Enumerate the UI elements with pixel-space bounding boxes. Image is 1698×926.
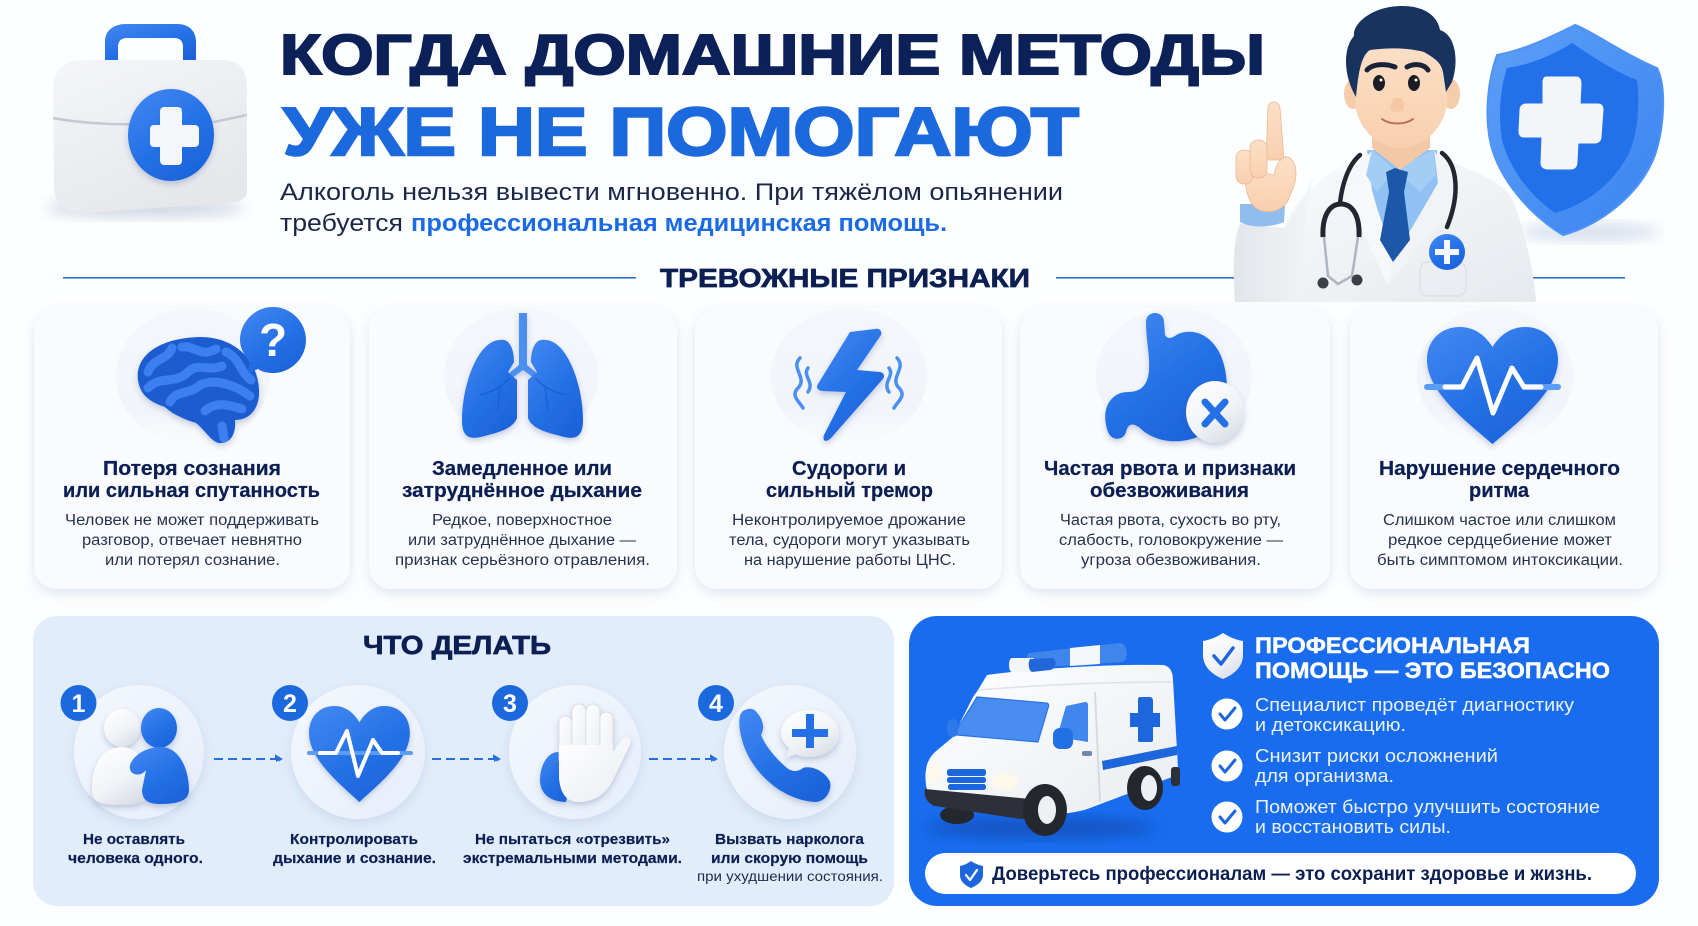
card description: Слишком частое или слишком bbox=[1383, 512, 1616, 529]
card title: Потеря сознания bbox=[103, 458, 281, 480]
tie bbox=[1380, 168, 1410, 262]
rear bumper bbox=[1171, 767, 1180, 786]
hand bbox=[1236, 102, 1296, 212]
card title bbox=[63, 458, 320, 502]
halo bbox=[116, 308, 270, 444]
bullet 2 bbox=[1212, 746, 1498, 786]
card title: Частая рвота и признаки bbox=[1044, 458, 1296, 480]
bullet 2: для организма. bbox=[1255, 766, 1394, 786]
card title bbox=[402, 458, 642, 502]
caption: экстремальными методами. bbox=[463, 850, 682, 867]
icon: first aid kit bbox=[45, 24, 247, 217]
card description bbox=[395, 512, 650, 569]
card background bbox=[1020, 308, 1330, 589]
icon: phone bbox=[739, 709, 830, 802]
headlights bbox=[926, 764, 942, 782]
caption bbox=[68, 831, 203, 867]
halo bbox=[1417, 308, 1573, 444]
bullet 3: Поможет быстро улучшить состояние bbox=[1255, 797, 1600, 817]
callout: trust professionals: Доверьтесь профессионалам — это сохранит здоровье и жизнь. bbox=[992, 864, 1592, 885]
windshield bbox=[955, 697, 1049, 742]
card description bbox=[1059, 512, 1284, 569]
sleeve bbox=[1234, 178, 1313, 302]
bullet 2: Снизит риски осложнений bbox=[1255, 746, 1498, 766]
panel: symptom card 4 bbox=[1020, 308, 1330, 589]
icon: question bubble: ? bbox=[259, 314, 287, 366]
panel: symptom card 2 bbox=[369, 308, 677, 589]
card title bbox=[1379, 458, 1620, 502]
badge: 2 bbox=[272, 685, 308, 721]
bullet 1: и детоксикацию. bbox=[1255, 715, 1406, 735]
caption: Контролировать bbox=[290, 831, 418, 848]
arrow 2 bbox=[432, 756, 499, 762]
step 1 bbox=[60, 685, 204, 867]
heading: professional help is safe: ПОМОЩЬ — ЭТО БЕЗОПАСНО bbox=[1255, 658, 1610, 683]
bullet 3: и восстановить силы. bbox=[1255, 817, 1451, 837]
icon: heart with pulse bbox=[309, 706, 411, 802]
icon: shield check bbox=[1203, 633, 1243, 679]
card title: Нарушение сердечного bbox=[1379, 458, 1620, 480]
door handle bbox=[1082, 751, 1092, 756]
card description: на нарушение работы ЦНС. bbox=[744, 552, 956, 569]
card description: быть симптомом интоксикации. bbox=[1377, 552, 1623, 569]
subtitle text: профессиональная медицинская помощь. bbox=[411, 210, 947, 237]
eyebrows bbox=[1367, 65, 1428, 70]
caption: или скорую помощь bbox=[711, 850, 868, 867]
card title: или сильная спутанность bbox=[63, 480, 320, 502]
card title: Судороги и bbox=[792, 458, 906, 480]
card description bbox=[729, 512, 970, 569]
badge: 3 bbox=[492, 685, 528, 721]
subtitle text bbox=[280, 179, 1063, 237]
grille bbox=[947, 769, 986, 790]
card description: или затруднённое дыхание — bbox=[408, 532, 637, 549]
subtitle text: Алкоголь нельзя вывести мгновенно. При тяжёлом опьянении bbox=[280, 179, 1063, 206]
icon: two people bbox=[92, 708, 189, 805]
title bbox=[280, 23, 1265, 170]
icon: stop hand bbox=[540, 704, 631, 802]
stethoscope bbox=[1340, 153, 1456, 227]
face bbox=[1355, 38, 1447, 148]
side window bbox=[1057, 702, 1088, 742]
panel background bbox=[33, 616, 894, 906]
caption bbox=[463, 831, 682, 867]
under wheel bbox=[940, 806, 974, 824]
card description: Неконтролируемое дрожание bbox=[732, 512, 966, 529]
nose and smile bbox=[1391, 98, 1404, 112]
caption bbox=[273, 831, 436, 867]
card title: обезвоживания bbox=[1090, 480, 1249, 502]
shirt and collar bbox=[1367, 150, 1438, 262]
body bbox=[925, 665, 1178, 815]
title: КОГДА ДОМАШНИЕ МЕТОДЫ bbox=[280, 23, 1265, 87]
badge: 2: 2 bbox=[283, 690, 297, 718]
title: УЖЕ НЕ ПОМОГАЮТ bbox=[283, 94, 1079, 170]
caption: Не оставлять bbox=[83, 831, 185, 848]
badge bbox=[1429, 234, 1465, 270]
icon: lightning bolt bbox=[817, 329, 884, 441]
bullet 3 bbox=[1212, 797, 1600, 837]
step 3 bbox=[463, 685, 682, 867]
bumper bbox=[925, 789, 1032, 819]
card background bbox=[34, 308, 350, 589]
wheels bbox=[1023, 766, 1163, 836]
bullet 1 bbox=[1212, 695, 1574, 735]
bullet 1: Специалист проведёт диагностику bbox=[1255, 695, 1574, 715]
side cross bbox=[1130, 697, 1160, 742]
heading: alarming signs: ТРЕВОЖНЫЕ ПРИЗНАКИ bbox=[660, 263, 1030, 293]
hair bbox=[1346, 6, 1456, 97]
heading: professional help is safe bbox=[1255, 633, 1610, 683]
mirrors bbox=[1053, 728, 1073, 749]
stripe bbox=[1102, 746, 1177, 770]
icon: x badge bbox=[1186, 381, 1244, 443]
panel: professional help bbox=[909, 616, 1659, 906]
section divider lines bbox=[63, 277, 1625, 279]
step 4 bbox=[697, 685, 883, 884]
caption: человека одного. bbox=[68, 850, 203, 867]
card background bbox=[369, 308, 677, 589]
card description: слабость, головокружение — bbox=[1059, 532, 1284, 549]
heading: professional help is safe: ПРОФЕССИОНАЛЬНАЯ bbox=[1255, 633, 1530, 658]
card description: разговор, отвечает невнятно bbox=[82, 532, 302, 549]
icon: tremor waves bbox=[795, 358, 902, 408]
coat bbox=[1234, 153, 1536, 302]
icon: small shield bbox=[960, 861, 983, 888]
card description: тела, судороги могут указывать bbox=[729, 532, 970, 549]
illustration: doctor bbox=[1234, 6, 1536, 302]
panel: symptom card 5 bbox=[1350, 308, 1658, 589]
card title bbox=[766, 458, 933, 502]
panel: symptom card 3 bbox=[695, 308, 1002, 589]
icon: lungs bbox=[462, 313, 583, 438]
card title: затруднённое дыхание bbox=[402, 480, 642, 502]
card title bbox=[1044, 458, 1296, 502]
caption bbox=[697, 831, 883, 884]
icon: heart with pulse bbox=[1427, 327, 1558, 444]
badge: 4: 4 bbox=[709, 690, 723, 718]
card background bbox=[1350, 308, 1658, 589]
icon: shield with cross bbox=[1487, 25, 1663, 240]
card description: признак серьёзного отравления. bbox=[395, 552, 650, 569]
card title: Замедленное или bbox=[432, 458, 612, 480]
arrow 1 bbox=[214, 756, 281, 762]
card title: сильный тремор bbox=[766, 480, 933, 502]
card title: ритма bbox=[1469, 480, 1530, 502]
icon: stomach bbox=[1105, 313, 1227, 441]
icon: question bubble bbox=[240, 307, 306, 373]
card description bbox=[65, 512, 319, 569]
illustration: ambulance bbox=[925, 643, 1180, 838]
callout: trust professionals bbox=[925, 853, 1636, 894]
badge: 4 bbox=[698, 685, 734, 721]
subtitle text: требуется bbox=[280, 210, 403, 237]
neck bbox=[1372, 130, 1430, 170]
heading: what to do: ЧТО ДЕЛАТЬ bbox=[363, 630, 551, 660]
icon: brain bbox=[138, 337, 259, 443]
card description: Частая рвота, сухость во рту, bbox=[1060, 512, 1281, 529]
caption: Не пытаться «отрезвить» bbox=[475, 831, 670, 848]
icon: plus bubble bbox=[781, 710, 839, 758]
halo bbox=[444, 308, 598, 444]
lights bar bbox=[1027, 643, 1127, 668]
caption: Вызвать нарколога bbox=[715, 831, 865, 848]
card description: Редкое, поверхностное bbox=[432, 512, 612, 529]
halo bbox=[1096, 308, 1252, 444]
step 2 bbox=[272, 685, 436, 867]
card description: Человек не может поддерживать bbox=[65, 512, 319, 529]
card description bbox=[1377, 512, 1623, 569]
caption: дыхание и сознание. bbox=[273, 850, 436, 867]
arrow 3 bbox=[649, 756, 716, 762]
card description: или потерял сознание. bbox=[105, 552, 280, 569]
badge: 1 bbox=[60, 685, 96, 721]
card description: угроза обезвоживания. bbox=[1081, 552, 1261, 569]
badge: 3: 3 bbox=[503, 690, 517, 718]
eye highlights bbox=[1380, 78, 1418, 82]
caption: при ухудшении состояния. bbox=[697, 868, 883, 884]
badge: 1: 1 bbox=[72, 690, 86, 718]
cuff bbox=[1240, 204, 1285, 226]
halo bbox=[771, 308, 927, 444]
panel: symptom card 1 bbox=[34, 307, 350, 589]
card description: редкое сердцебиение может bbox=[1388, 532, 1612, 549]
eyes bbox=[1373, 75, 1420, 91]
card background bbox=[695, 308, 1002, 589]
panel: what to do bbox=[33, 616, 894, 906]
panel background bbox=[909, 616, 1659, 906]
ears bbox=[1344, 79, 1362, 109]
